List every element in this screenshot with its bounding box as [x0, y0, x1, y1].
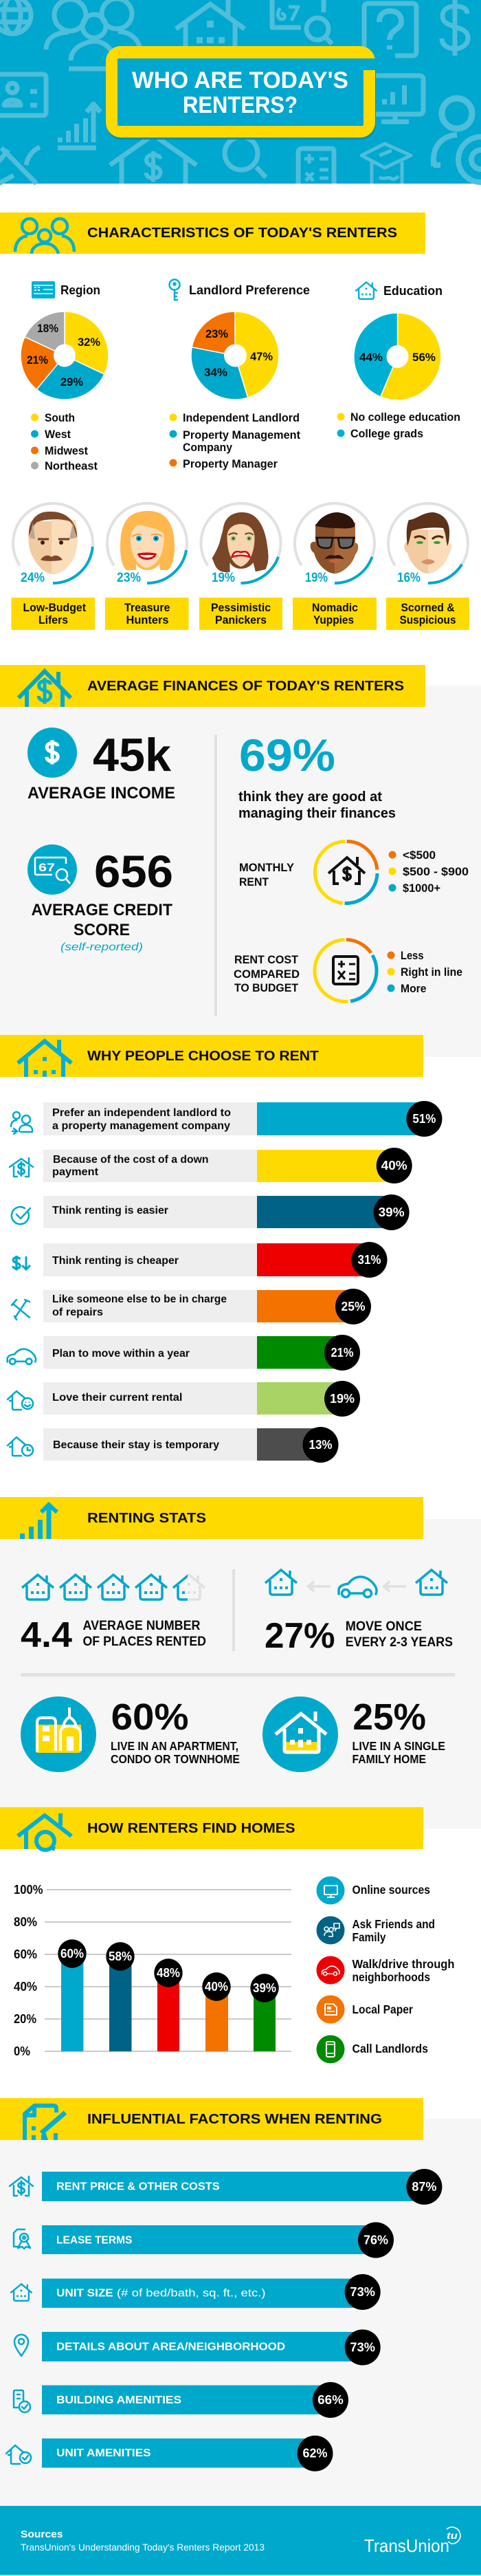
row: love current rental: [8, 1381, 360, 1417]
stat: single family home: FAMILY HOME: [352, 1752, 426, 1766]
panel: region pie: 32%: [78, 336, 100, 349]
legend: education: [337, 411, 460, 440]
legend: rent: <$500: [403, 849, 436, 862]
panel: education pie: [337, 282, 460, 440]
legend: budget: [388, 949, 462, 995]
row: unit size: 73%: [350, 2285, 375, 2299]
legend: how renters find homes: [316, 1876, 455, 2063]
panel: region pie: 21%: [27, 353, 48, 367]
title box: RENTERS?: [183, 92, 298, 118]
y-axis labels: 40%: [14, 1980, 37, 1994]
row: unit size: (# of bed/bath, sq. ft., etc.): [117, 2287, 266, 2300]
stat: apartment: CONDO OR TOWNHOME: [111, 1752, 240, 1766]
section heading: how renters find homes: HOW RENTERS FIND HOMES: [87, 1821, 295, 1836]
legend item: call landlords: Call Landlords: [352, 2042, 428, 2055]
icon: rising bars with arrow: [20, 1505, 57, 1539]
panel: average income: 45k: [93, 729, 171, 781]
stat: move every 2-3 years: 27%: [265, 1616, 335, 1656]
section heading: characteristics: CHARACTERISTICS OF TODAY'S RENTERS: [87, 226, 397, 241]
panel: landlord preference pie: 23%: [205, 327, 228, 340]
panel: landlord preference pie: [169, 279, 310, 470]
legend: landlord preference: [169, 411, 300, 470]
face ring: [107, 503, 187, 583]
panel: average credit score: [27, 844, 173, 953]
panel: average income: [27, 728, 175, 803]
row: unit size: [10, 2274, 381, 2310]
face illustration: [28, 512, 78, 574]
icon: credit score circle: [27, 844, 77, 895]
icon: key: [169, 279, 180, 300]
bar: walk or drive 48%: 48%: [157, 1966, 180, 1980]
persona: scorned and suspicious: [386, 503, 469, 630]
row: lease terms: [14, 2223, 394, 2258]
legend item: ask friends and family: Family: [352, 1930, 386, 1944]
row: unit size: UNIT SIZE: [56, 2287, 113, 2300]
page background panels: [0, 686, 481, 2506]
persona: pessimistic panickers: [199, 503, 282, 630]
legend: region: Midwest: [45, 444, 88, 457]
legend: education: College grads: [350, 427, 423, 440]
pie chart: region: [21, 312, 109, 400]
legend: region: [31, 411, 98, 472]
icon: document with pencil: [25, 2106, 65, 2140]
bar: friends and family 58%: 58%: [109, 1950, 132, 1963]
section heading: why people choose to rent: [0, 1035, 423, 1077]
row: repairs: of repairs: [52, 1307, 103, 1318]
persona: treasure hunters: 23%: [117, 571, 141, 585]
icon: people: [15, 219, 74, 254]
label box: [293, 598, 377, 630]
row: lease terms: LEASE TERMS: [56, 2235, 132, 2246]
legend: region: West: [45, 428, 71, 441]
legend item: ask friends and family: [316, 1916, 435, 1945]
label box: [105, 598, 188, 630]
row: renting is cheaper: Think renting is cheaper: [52, 1255, 179, 1267]
panel: average credit score: 656: [94, 846, 173, 897]
section heading: characteristics: [0, 212, 425, 254]
legend item: local paper: Local Paper: [352, 2002, 413, 2016]
row: love current rental: 19%: [330, 1392, 355, 1406]
row: cost of a down payment: 40%: [381, 1159, 407, 1172]
footer: [0, 2506, 481, 2575]
bar: friends and family 58%: [106, 1942, 135, 2051]
row: renting is cheaper: [13, 1242, 388, 1278]
bar: local paper 40%: 40%: [205, 1980, 228, 1994]
y-axis labels: 0%: [14, 2044, 30, 2058]
icon: house with dollar: [19, 671, 71, 707]
section heading: how renters find homes: [0, 1807, 423, 1850]
bar: call landlords 39%: [250, 1974, 279, 2051]
title box: WHO ARE TODAY'S: [132, 67, 348, 94]
bar: online sources 60%: 60%: [60, 1947, 84, 1961]
legend: landlord preference: Property Management: [183, 428, 300, 441]
label box: Hunters: [126, 613, 169, 626]
header banner: [0, 0, 481, 184]
legend: budget: Right in line: [401, 965, 462, 979]
row: cost of a down payment: [10, 1148, 412, 1183]
stat: average number of places rented: AVERAGE NUMBER: [82, 1619, 201, 1633]
logo: TransUnion: TransUnion: [364, 2535, 449, 2556]
label box: Nomadic: [312, 601, 358, 614]
face illustration: [311, 512, 358, 574]
face illustration: [404, 512, 451, 574]
icon: move route: [265, 1570, 447, 1597]
persona: low-budget lifers: 24%: [21, 571, 45, 585]
face ring: [201, 503, 280, 583]
legend: landlord preference: Company: [183, 441, 232, 454]
sources text: [21, 2529, 265, 2553]
label box: Low-Budget: [23, 601, 86, 614]
legend item: call landlords: [316, 2035, 428, 2063]
icon: credit score circle: 67: [38, 861, 55, 874]
panel: education pie: 44%: [359, 351, 383, 364]
label box: Pessimistic: [211, 601, 271, 614]
legend: region: South: [45, 411, 75, 424]
stat: 69 percent good at finances: managing their finances: [238, 806, 396, 821]
panel: landlord preference pie: 47%: [250, 350, 273, 363]
icon: house with magnifier: [18, 1813, 71, 1850]
panel: region pie: 18%: [37, 322, 58, 335]
panel: region pie: Region: [60, 283, 100, 297]
bar chart: why people choose to rent: [8, 1101, 442, 1463]
panel: landlord preference pie: Landlord Preference: [189, 283, 310, 297]
stat: 69 percent good at finances: think they are good at: [238, 789, 382, 805]
row: renting is cheaper: 31%: [357, 1253, 381, 1267]
persona: low-budget lifers: [11, 503, 95, 630]
row: plan to move: 21%: [331, 1346, 353, 1360]
panel: region pie: 29%: [60, 375, 83, 389]
row: renting is easier: 39%: [379, 1205, 405, 1219]
y-axis labels: [14, 1883, 43, 2058]
sources text: Sources: [21, 2529, 63, 2540]
stat: average number of places rented: OF PLACES RENTED: [82, 1635, 206, 1649]
label box: [386, 598, 469, 630]
bar: call landlords 39%: 39%: [253, 1981, 276, 1995]
bar chart: influential factors: [6, 2169, 442, 2471]
icon: house: [355, 282, 377, 299]
row: building amenities: 66%: [317, 2393, 344, 2407]
panel: rent cost compared to budget: COMPARED: [234, 968, 300, 981]
legend: budget: More: [401, 982, 426, 995]
stat: move every 2-3 years: MOVE ONCE: [346, 1619, 422, 1634]
section heading: renting stats: RENTING STATS: [87, 1511, 206, 1526]
panel: education pie: 56%: [412, 351, 436, 364]
bar: walk or drive 48%: [154, 1958, 183, 2051]
panel: landlord preference pie: 34%: [204, 366, 227, 379]
panel: education pie: Education: [383, 284, 443, 298]
label box: [199, 598, 282, 630]
title box: [106, 46, 376, 140]
y-axis labels: 80%: [14, 1915, 37, 1929]
row: lease terms: 76%: [363, 2234, 388, 2247]
row: area details: DETAILS ABOUT AREA/NEIGHBORHOOD: [56, 2341, 285, 2353]
row: repairs: [12, 1289, 371, 1324]
panel: average credit score: SCORE: [74, 921, 130, 939]
logo: TransUnion: [364, 2527, 460, 2556]
panel: region pie: [21, 281, 109, 472]
panel: monthly rent: MONTHLY: [239, 861, 295, 874]
face ring: [295, 503, 374, 583]
label box: Treasure: [124, 601, 170, 614]
row: renting is easier: [12, 1194, 410, 1230]
y-axis labels: 20%: [14, 2012, 36, 2026]
stat: move every 2-3 years: EVERY 2-3 YEARS: [346, 1635, 453, 1650]
logo: TransUnion: tu: [447, 2530, 458, 2541]
row: independent landlord: Prefer an independent landlord to: [52, 1107, 231, 1119]
row: independent landlord: a property management company: [52, 1120, 230, 1132]
legend: landlord preference: Independent Landlord: [183, 411, 300, 424]
row: building amenities: BUILDING AMENITIES: [56, 2394, 181, 2406]
row: plan to move: [8, 1335, 360, 1371]
stat: 69 percent good at finances: 69%: [239, 730, 335, 781]
panel: monthly rent: [239, 842, 469, 903]
row: building amenities: [14, 2382, 348, 2418]
persona: treasure hunters: [105, 503, 188, 630]
stat: average number of places rented: [21, 1575, 206, 1655]
label box: Lifers: [38, 613, 68, 626]
legend: education: No college education: [350, 411, 460, 424]
icon: house: [18, 1040, 71, 1077]
panel: rent cost compared to budget: [234, 939, 462, 1001]
row: repairs: 25%: [341, 1300, 366, 1313]
stat: single family home: LIVE IN A SINGLE: [352, 1739, 445, 1753]
label box: Scorned &: [401, 601, 455, 614]
legend item: local paper: [316, 1996, 413, 2023]
label box: Suspicious: [400, 613, 456, 626]
icon: house with dollar: [328, 857, 365, 884]
legend item: walk or drive: neighborhoods: [352, 1970, 430, 1984]
row: temporary stay: 13%: [309, 1438, 333, 1452]
label box: [11, 598, 95, 630]
legend: region: Northeast: [45, 459, 98, 472]
bar: online sources 60%: [58, 1939, 87, 2051]
stat: single family home: [262, 1696, 445, 1772]
row: temporary stay: [8, 1427, 338, 1463]
section heading: influential factors: [0, 2098, 423, 2140]
pie chart: education: [354, 313, 441, 400]
row: rent price: [10, 2169, 442, 2205]
panel: average credit score: (self-reported): [60, 941, 143, 953]
face ring: [388, 503, 468, 583]
panel: rent cost compared to budget: RENT COST: [234, 953, 299, 966]
panel: monthly rent: RENT: [239, 875, 269, 888]
legend: rent: [389, 849, 469, 895]
section heading: average finances: AVERAGE FINANCES OF TODAY'S RENTERS: [87, 679, 404, 694]
donut ring: budget: [315, 939, 377, 1001]
face ring: [13, 503, 93, 583]
section heading: why people choose to rent: WHY PEOPLE CHOOSE TO RENT: [87, 1049, 319, 1064]
legend: rent: $500 - $900: [403, 865, 469, 878]
icon: row of houses: [22, 1575, 205, 1600]
legend: landlord preference: Property Manager: [183, 457, 278, 470]
panel: average credit score: AVERAGE CREDIT: [32, 901, 172, 919]
donut ring: rent: [315, 842, 377, 903]
row: rent price: 87%: [412, 2180, 436, 2194]
section heading: average finances: [0, 665, 425, 707]
row: plan to move: Plan to move within a year: [52, 1348, 190, 1360]
row: independent landlord: [11, 1101, 442, 1137]
persona: nomadic yuppies: 19%: [305, 571, 328, 585]
y-axis labels: 100%: [14, 1883, 43, 1897]
legend item: online sources: Online sources: [352, 1883, 430, 1897]
face illustration: [212, 512, 268, 574]
legend: budget: Less: [401, 949, 423, 962]
section heading: influential factors: INFLUENTIAL FACTORS WHEN RENTING: [87, 2112, 382, 2127]
row: independent landlord: 51%: [412, 1112, 436, 1126]
legend item: walk or drive: Walk/drive through: [352, 1957, 455, 1971]
label box: Yuppies: [313, 613, 354, 626]
persona: nomadic yuppies: [293, 503, 377, 630]
panel: rent cost compared to budget: TO BUDGET: [234, 981, 299, 994]
bar: local paper 40%: [202, 1972, 231, 2051]
stat: apartment: LIVE IN AN APARTMENT,: [111, 1739, 238, 1753]
row: area details: 73%: [350, 2341, 375, 2355]
bar chart: how renters find homes: [14, 1883, 291, 2058]
row: area details: [14, 2330, 381, 2366]
row: renting is easier: Think renting is easier: [52, 1205, 168, 1216]
row: cost of a down payment: Because of the cost of a down: [53, 1154, 209, 1166]
icon: dollar circle: [27, 728, 77, 778]
header background icon pattern: [0, 0, 481, 184]
icon: buildings circle: [21, 1696, 96, 1772]
y-axis labels: 60%: [14, 1947, 37, 1961]
persona: pessimistic panickers: 19%: [212, 571, 235, 585]
face illustration: [120, 511, 175, 574]
pie chart: landlord preference: [191, 312, 279, 400]
icon: house circle: [262, 1696, 338, 1772]
row: rent price: RENT PRICE & OTHER COSTS: [56, 2181, 220, 2192]
row: unit amenities: UNIT AMENITIES: [56, 2447, 151, 2459]
row: cost of a down payment: payment: [52, 1166, 98, 1178]
icon: calculator: [333, 957, 358, 984]
section heading: renting stats: [0, 1497, 423, 1539]
legend item: online sources: [316, 1876, 430, 1905]
row: unit amenities: [6, 2436, 333, 2471]
stat: apartment: [21, 1696, 240, 1772]
sources text: TransUnion's Understanding Today's Renters Report 2013: [21, 2542, 265, 2553]
icon: region map list: [32, 281, 55, 298]
stat: apartment: 60%: [111, 1696, 189, 1738]
gridlines: [45, 1890, 291, 2051]
stat: average number of places rented: 4.4: [21, 1615, 72, 1655]
row: repairs: Like someone else to be in charge: [52, 1294, 227, 1305]
panel: average income: AVERAGE INCOME: [27, 784, 175, 803]
legend item: ask friends and family: Ask Friends and: [352, 1917, 435, 1931]
row: love current rental: Love their current rental: [52, 1392, 183, 1404]
stat: single family home: 25%: [353, 1696, 426, 1738]
row: unit amenities: 62%: [302, 2447, 327, 2460]
stat: move every 2-3 years: [265, 1570, 453, 1656]
label box: Panickers: [215, 613, 267, 626]
row: temporary stay: Because their stay is temporary: [53, 1439, 219, 1451]
legend: rent: $1000+: [403, 882, 440, 895]
legend item: walk or drive: [316, 1956, 455, 1985]
persona: scorned and suspicious: 16%: [397, 571, 421, 585]
stat: 69 percent good at finances: [238, 730, 396, 821]
